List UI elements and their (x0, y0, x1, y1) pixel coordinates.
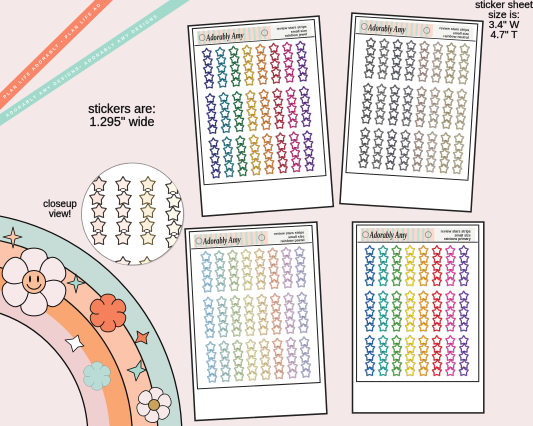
text: closeup label: view! (49, 209, 71, 220)
star strips (202, 41, 315, 178)
icon: sparkles (3, 227, 149, 381)
sticker sheet: rainbow neutral: small size (453, 31, 469, 36)
rainbow band: pink (0, 290, 110, 426)
text: sheet size (475, 0, 533, 41)
sticker sheet: rainbow dark: rainbow jewel (285, 32, 307, 38)
sticker sheet: rainbow primary: review stars strips (441, 230, 471, 234)
star strips (365, 246, 469, 375)
text: sticker width (88, 102, 156, 129)
sticker sheet: rainbow neutral: rainbow neutral (443, 34, 469, 40)
closeup magnifier circle (82, 163, 184, 270)
text: sheet size: size is: (488, 10, 520, 21)
ribbon: adorably amy designs (0, 0, 190, 126)
sticker sheet: rainbow dark: review stars strips (277, 25, 307, 31)
sticker sheet: rainbow dark: small size (291, 29, 307, 34)
sticker sheet: rainbow pastel: rainbow pastel (280, 238, 305, 243)
sticker sheet: rainbow primary (353, 222, 484, 413)
ribbon: adorably amy designs: ADORABLY AMY DESIGNS• ADORABLY AMY DESIGNS (5, 13, 159, 118)
rainbow band: teal (0, 216, 182, 426)
text: sheet size: 3.4" W (489, 20, 520, 31)
icon: small daisy (135, 386, 173, 424)
rainbow (0, 216, 182, 426)
rainbow band: peach (0, 241, 158, 426)
sticker sheet: rainbow dark (188, 16, 333, 216)
ribbon: plan life adorably: PLAN LIFE ADORABLY • PLAN LIFE AD (2, 2, 102, 99)
text: closeup label (43, 199, 77, 220)
rainbow band: orange (0, 268, 132, 426)
rainbow inner (0, 313, 88, 426)
sticker sheet: rainbow neutral (340, 13, 483, 212)
sticker sheet: rainbow pastel: small size (288, 234, 305, 239)
star strips (201, 247, 311, 382)
text: sticker width: 1.295" wide (90, 115, 154, 129)
icon: smiley flower (0, 248, 70, 316)
icon: teal flower (82, 362, 112, 390)
text: closeup label: closeup (43, 199, 77, 210)
text: sheet size: 4.7" T (491, 30, 518, 41)
icon: red flower (88, 294, 128, 332)
sticker sheet: rainbow primary: small size (455, 234, 471, 238)
star strips (359, 38, 470, 174)
sticker sheet: rainbow pastel (185, 222, 327, 421)
text: sheet size: sticker sheet (475, 0, 533, 11)
sticker sheet: rainbow neutral: review stars strips (439, 26, 469, 32)
sticker sheet: rainbow primary: rainbow primary (444, 237, 471, 241)
sticker sheet: rainbow pastel: review stars strips (274, 230, 304, 236)
text: sticker width: stickers are: (88, 102, 156, 116)
